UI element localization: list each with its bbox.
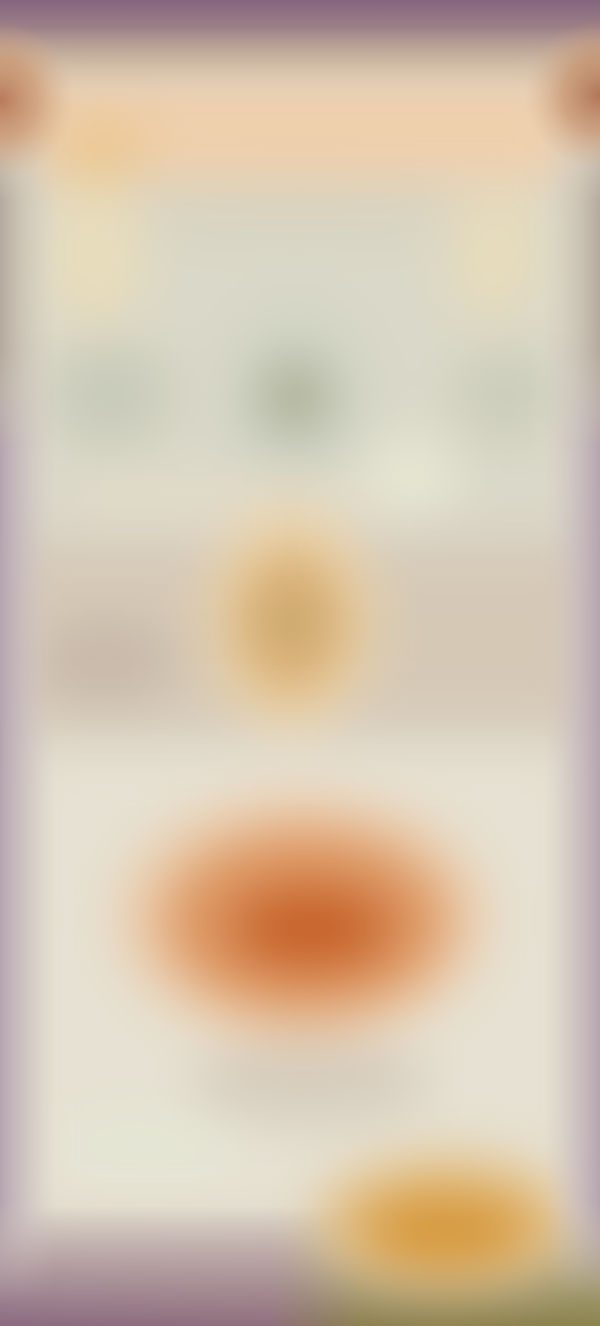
- icon: middle tan circle, halo: [206, 503, 376, 733]
- panel: right edge, grey: [564, 146, 600, 418]
- panel: left grey patch: [48, 343, 172, 447]
- icon: gold blob core: [360, 1192, 530, 1268]
- icon: gold blob halo: [315, 1154, 575, 1290]
- panel: top purple edge: [0, 0, 600, 92]
- panel: header left warm patch: [50, 115, 150, 185]
- panel: upper left yellow patch: [45, 180, 145, 330]
- panel: upper section base: [10, 180, 590, 530]
- panel: light lower band: [80, 478, 360, 526]
- icon: middle tan circle, body: [233, 548, 349, 696]
- panel: lower cream section: [20, 745, 580, 1225]
- panel: header band, peach: [30, 80, 570, 180]
- chart: orange ellipse, core: [232, 888, 388, 968]
- panel: right edge, mauve: [554, 386, 600, 1286]
- chart: orange ellipse, pale halo: [117, 793, 487, 1043]
- panel: header sub-band: [110, 182, 490, 242]
- panel: lower left light patch: [50, 1109, 250, 1181]
- panel: band beneath ellipse: [190, 1040, 430, 1124]
- panel: bottom band, purple to olive: [0, 1206, 600, 1326]
- icon: upper centre circle, outer ring: [217, 301, 373, 485]
- panel: middle left grey patch: [35, 620, 175, 704]
- chart: orange ellipse, outer ring: [165, 832, 445, 1012]
- panel: bottom gold blob layer: [315, 1154, 575, 1290]
- panel: left edge, mauve: [0, 386, 42, 1242]
- panel: top left orange corner: [0, 20, 80, 180]
- panel: right grey patch: [453, 350, 557, 440]
- panel: light lower right patch: [362, 433, 458, 517]
- panel: upper right yellow patch: [445, 185, 545, 325]
- panel: middle section base: [10, 555, 590, 720]
- icon: upper centre circle, core: [255, 355, 335, 439]
- panel: top right orange corner: [520, 20, 600, 170]
- icon: middle tan circle, core: [267, 594, 315, 650]
- panel: left edge, grey: [0, 152, 38, 418]
